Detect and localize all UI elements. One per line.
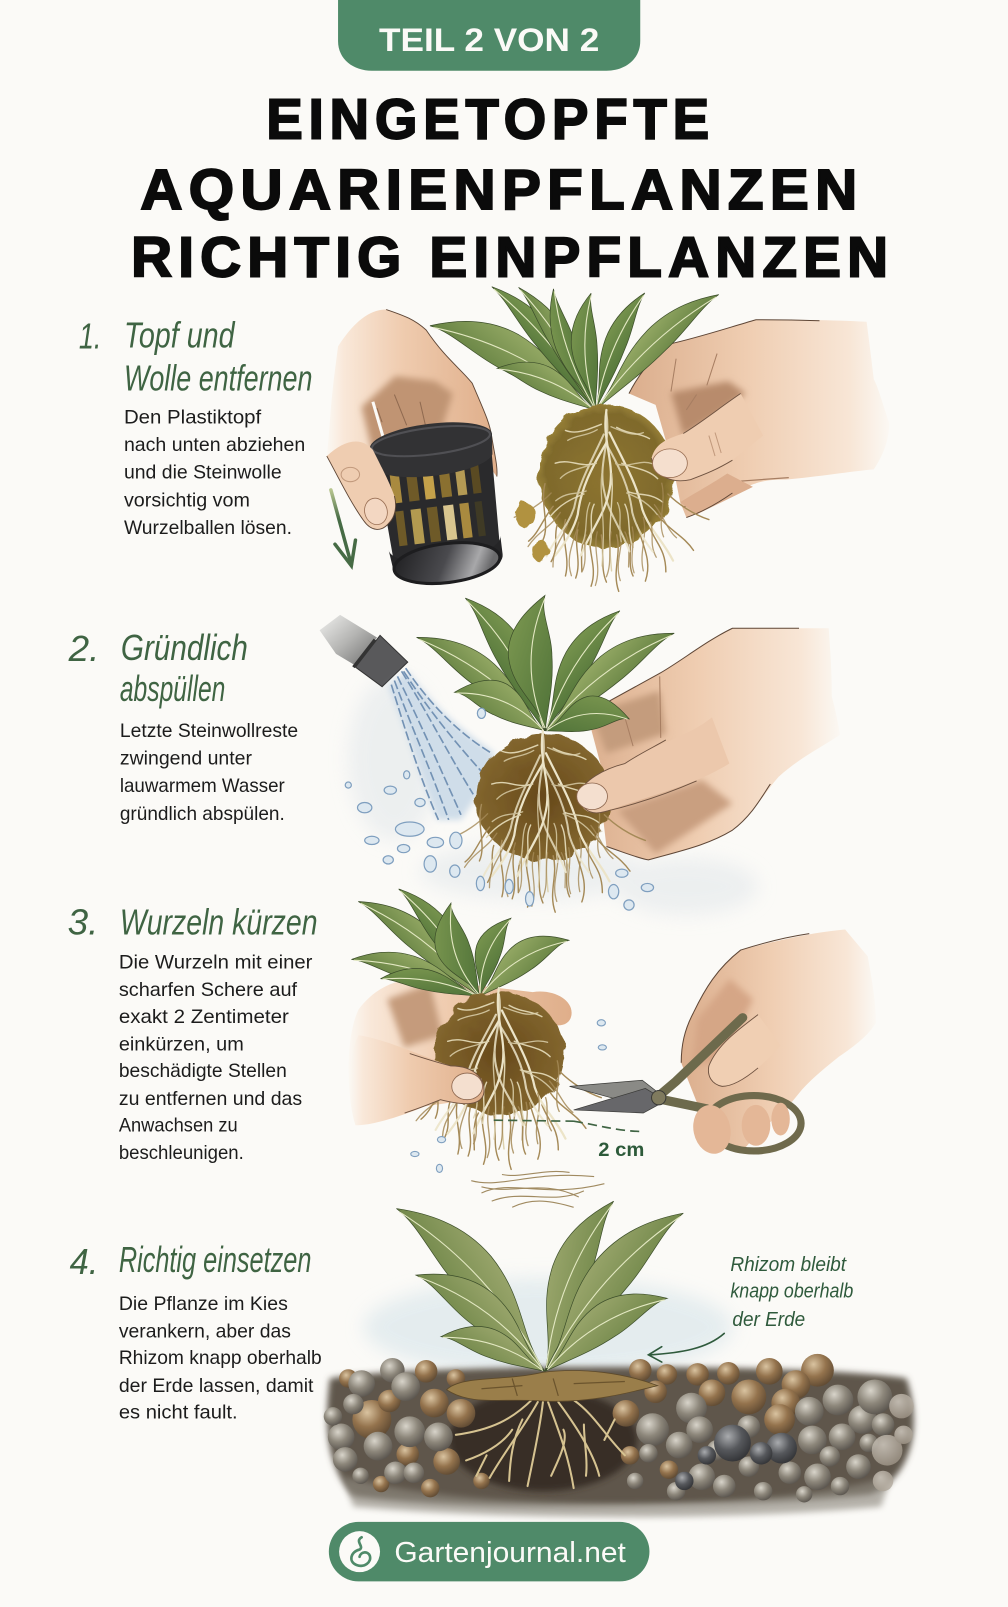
callout: rhizome note: Rhizom bleibt xyxy=(730,1253,847,1276)
step 2 body text xyxy=(120,720,298,825)
step 4 body text: Rhizom knapp oberhalb xyxy=(119,1347,322,1369)
step 1 number: 1. xyxy=(79,316,101,356)
step 3 body text: Anwachsen zu xyxy=(119,1114,238,1136)
icon: water drops xyxy=(345,708,654,910)
icon: logo xyxy=(339,1531,380,1572)
icon: thumb left hand xyxy=(350,1035,484,1125)
icon: hand xyxy=(579,628,840,860)
icon: rhizome xyxy=(447,1370,658,1401)
panel: step 2 text xyxy=(68,628,298,825)
step 2 body text: gründlich abspülen. xyxy=(120,803,285,825)
step 2 heading: Gründlich xyxy=(121,628,248,668)
step 1 heading: Topf und xyxy=(124,315,235,355)
step 1 body text xyxy=(124,406,305,539)
icon: left hand holding pot xyxy=(327,310,497,529)
footer pill: Gartenjournal.net xyxy=(329,1522,649,1581)
callout: rhizome note xyxy=(730,1253,853,1331)
step 1 body text: nach unten abziehen xyxy=(124,434,305,456)
illustration: step 3 xyxy=(349,877,876,1207)
illustration: step 2 xyxy=(320,585,840,915)
icon: plant leaves xyxy=(391,1183,688,1376)
banner: Teil 2 von 2 xyxy=(338,0,640,71)
icon: cut root clippings xyxy=(471,1171,604,1207)
panel: step 3 text xyxy=(68,903,318,1164)
water wash background xyxy=(348,676,758,915)
icon: fingers through handle xyxy=(689,1102,790,1157)
step 3 body text: Die Wurzeln mit einer xyxy=(119,952,313,974)
icon: water drops xyxy=(411,1020,606,1172)
step 2 body text: Letzte Steinwollreste xyxy=(120,720,298,742)
icon: right hand xyxy=(629,320,889,518)
step 3 heading: Wurzeln kürzen xyxy=(120,903,318,943)
label: 2 cm: 2 cm xyxy=(598,1139,644,1161)
step 1 body text: und die Steinwolle xyxy=(124,462,282,484)
icon: root ball xyxy=(402,988,601,1169)
panel: step 4 text xyxy=(70,1240,322,1423)
icon: dark soil under plant xyxy=(449,1389,637,1491)
step 1 body text: Wurzelballen lösen. xyxy=(124,517,292,539)
water wash behind plant xyxy=(364,1278,732,1376)
icon: plant leaves xyxy=(414,585,677,736)
icon: root ball xyxy=(514,405,709,591)
step 2 body text: zwingend unter xyxy=(120,748,253,770)
step 4 body text: es nicht fault. xyxy=(119,1401,238,1423)
step 3 body text xyxy=(119,952,313,1164)
callout: rhizome note: der Erde xyxy=(732,1308,805,1331)
step 4 heading: Richtig einsetzen xyxy=(119,1240,311,1280)
step 2 number: 2. xyxy=(68,629,99,669)
cut line: 2 cm xyxy=(494,1120,639,1131)
icon: water stream xyxy=(388,668,495,820)
title xyxy=(131,87,894,289)
icon: scissors xyxy=(570,1018,801,1151)
arrow: pull down xyxy=(331,490,355,566)
icon: root ball xyxy=(451,731,645,912)
callout: rhizome note: knapp oberhalb xyxy=(730,1279,853,1302)
footer text: Gartenjournal.net xyxy=(394,1537,626,1569)
step 1 heading: Wolle entfernen xyxy=(124,358,312,398)
icon: thumb xyxy=(577,717,729,813)
step 3 body text: beschleunigen. xyxy=(119,1142,244,1164)
step 1 body text: vorsichtig vom xyxy=(124,489,250,511)
icon: soil base xyxy=(327,1367,914,1517)
icon: soil crumbs xyxy=(515,503,548,562)
title: RICHTIG EINPFLANZEN xyxy=(131,226,894,289)
banner: Teil 2 von 2: TEIL 2 VON 2 xyxy=(379,21,599,58)
illustration: step 4 xyxy=(324,1183,914,1517)
step 4 body text: der Erde lassen, damit xyxy=(119,1375,314,1397)
icon: thumb right hand xyxy=(708,1015,781,1086)
icon: left hand xyxy=(349,979,572,1117)
step 2 heading xyxy=(120,628,248,709)
step 3 body text: beschädigte Stellen xyxy=(119,1060,287,1082)
illustration: step 1 xyxy=(327,274,889,591)
icon: right hand xyxy=(681,930,876,1153)
step 3 body text: zu entfernen und das xyxy=(119,1088,302,1110)
step 4 body text: verankern, aber das xyxy=(119,1320,291,1342)
icon: thumb over pot xyxy=(327,441,396,529)
arrow: callout to rhizome xyxy=(648,1333,724,1362)
step 4 body text: Die Pflanze im Kies xyxy=(119,1293,288,1315)
step 2 body text: lauwarmem Wasser xyxy=(120,775,285,797)
title: EINGETOPFTE xyxy=(266,87,715,150)
step 2 heading: abspüllen xyxy=(120,669,225,709)
icon: plant leaves xyxy=(350,877,572,1004)
icon: thumb on root ball xyxy=(652,394,763,481)
icon: gravel xyxy=(324,1354,914,1502)
icon: black plastic pot xyxy=(368,416,509,590)
title: AQUARIENPFLANZEN xyxy=(140,158,864,221)
step 4 number: 4. xyxy=(70,1242,98,1282)
icon: plant leaves xyxy=(427,274,722,416)
step 4 body text xyxy=(119,1293,322,1423)
icon: hose xyxy=(320,615,408,687)
panel: step 1 text xyxy=(79,315,312,539)
step 3 number: 3. xyxy=(68,903,98,943)
icon: small leaf over hand xyxy=(541,691,630,736)
step 1 body text: Den Plastiktopf xyxy=(124,406,262,428)
step 3 body text: einkürzen, um xyxy=(119,1033,244,1055)
step 3 body text: exakt 2 Zentimeter xyxy=(119,1006,289,1028)
step 3 body text: scharfen Schere auf xyxy=(119,979,298,1001)
step 1 heading xyxy=(124,315,312,398)
icon: roots in soil xyxy=(456,1399,625,1488)
